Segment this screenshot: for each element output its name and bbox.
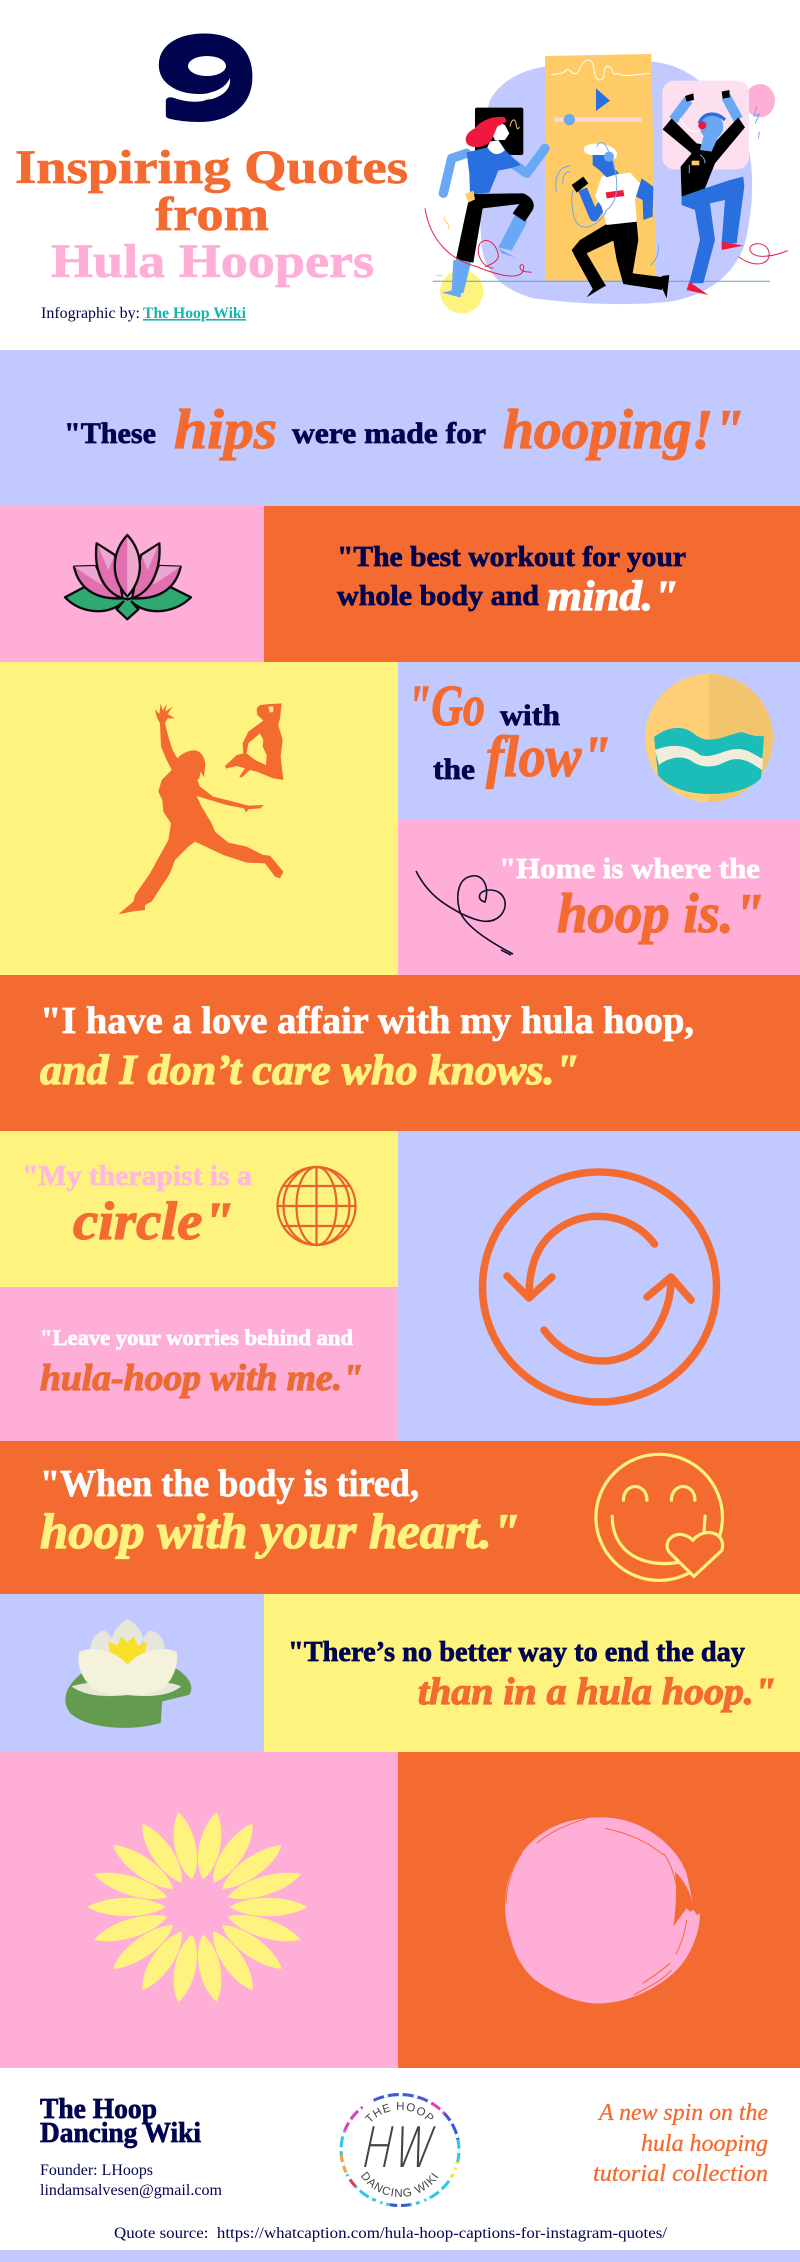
icon: yellow daisy — [88, 1811, 308, 2003]
tagline: tutorial collection — [593, 2161, 768, 2187]
quote text: than in a hula hoop." — [418, 1671, 776, 1713]
quote text: "The best workout for your — [337, 541, 686, 573]
byline: Infographic by: — [41, 305, 140, 322]
bottom band — [0, 2250, 800, 2262]
quote text: hula-hoop with me." — [40, 1358, 363, 1399]
quote text: with — [500, 699, 560, 732]
tagline: hula hooping — [641, 2131, 768, 2157]
woman — [452, 215, 527, 293]
title: Inspiring Quotes — [15, 141, 408, 194]
quote text: "There’s no better way to end the day — [288, 1636, 745, 1668]
illustration: three dancers with music player — [425, 54, 788, 313]
quote text — [64, 399, 744, 461]
panel: tired body quote — [0, 1441, 800, 1594]
logo ring text lower: DANCING WIKI — [361, 2172, 438, 2197]
footer brand name — [40, 2094, 201, 2149]
panel: cycle icon — [398, 1131, 800, 1441]
quote text — [40, 1000, 694, 1094]
icon: lotus flower — [65, 535, 191, 619]
quote source: Quote source: https://whatcaption.com/hula-hoop-captions-for-instagram-quotes/ — [114, 2225, 668, 2242]
quote text: "These — [64, 417, 156, 450]
panel: water lily — [0, 1594, 264, 1752]
logo ring text: THE HOOP — [364, 2102, 434, 2122]
big number 9: 9 — [156, 18, 257, 143]
panel: best way to end the day quote — [264, 1594, 800, 1752]
title — [15, 141, 408, 288]
quote text: mind." — [547, 574, 678, 620]
logo: The Hoop Dancing Wiki — [340, 2093, 460, 2207]
quote text — [22, 1160, 252, 1251]
icon: circular arrows in a ring — [482, 1172, 716, 1402]
panel: lotus — [0, 506, 264, 662]
panel: sunflower — [0, 1752, 398, 2068]
quote text: hooping!" — [503, 399, 744, 461]
footer brand name: The Hoop — [40, 2094, 157, 2125]
header — [15, 18, 788, 322]
icon: heart scribble — [416, 871, 513, 955]
panel: leave your worries quote — [0, 1287, 398, 1441]
tagline — [593, 2100, 768, 2187]
panel: love affair quote — [0, 975, 800, 1131]
panel: dancer silhouettes — [0, 662, 398, 975]
quote text — [288, 1636, 776, 1713]
footer brand name: Dancing Wiki — [40, 2118, 201, 2149]
seated dancer — [572, 222, 663, 290]
icon: water lily — [65, 1619, 191, 1728]
byline — [41, 305, 247, 322]
quote text — [407, 673, 611, 789]
founder contact — [40, 2162, 223, 2199]
tagline: A new spin on the — [597, 2100, 768, 2126]
quote text — [40, 1463, 520, 1559]
quote text: were made for — [292, 417, 486, 450]
quote text — [337, 541, 686, 620]
quote text: "My therapist is a — [22, 1160, 252, 1192]
quote text: hips — [174, 399, 277, 461]
founder contact: lindamsalvesen@gmail.com — [40, 2182, 223, 2199]
arms-up dancer — [673, 97, 738, 120]
quote text: circle" — [73, 1191, 234, 1251]
title: from — [155, 188, 269, 241]
quote text: "Leave your worries behind and — [40, 1325, 353, 1350]
panel: hips quote — [0, 350, 800, 506]
founder contact: Founder: LHoops — [40, 2162, 153, 2179]
quote text: the — [433, 753, 475, 786]
icon: pink brush circle — [505, 1817, 700, 2003]
quote text: "Home is where the — [499, 853, 760, 885]
quote text: "Go — [407, 673, 485, 738]
panel: brush circle — [398, 1752, 800, 2068]
quote text: "When the body is tired, — [40, 1463, 419, 1505]
quote text: hoop is." — [557, 883, 764, 945]
quote text — [40, 1325, 363, 1399]
quote text: whole body and — [337, 580, 539, 612]
quote text — [499, 853, 764, 945]
quote text: "I have a love affair with my hula hoop, — [40, 1000, 694, 1042]
icon: smiley with heart — [596, 1454, 723, 1580]
icon: jumping woman silhouette — [225, 703, 283, 780]
icon: leaping woman silhouette — [118, 703, 283, 914]
footer — [40, 2093, 768, 2242]
quote text: hoop with your heart." — [40, 1503, 520, 1559]
icon: waves in circle — [645, 674, 773, 802]
panel: therapist quote — [0, 1131, 398, 1287]
panel: best workout quote — [264, 506, 800, 662]
quote text: and I don’t care who knows." — [40, 1048, 579, 1094]
panel: go with the flow — [398, 662, 800, 819]
byline: The Hoop Wiki — [143, 305, 247, 322]
quote text: flow" — [486, 724, 611, 789]
title: Hula Hoopers — [51, 235, 374, 288]
icon: globe — [278, 1167, 356, 1245]
panel: home is where the hoop is — [398, 819, 800, 975]
logo monogram: HW — [356, 2116, 442, 2181]
